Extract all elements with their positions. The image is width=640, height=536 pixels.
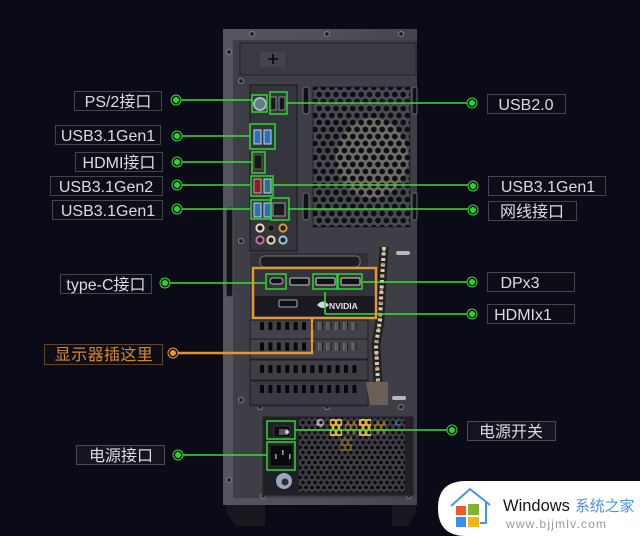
label: display: 显示器插这里: [55, 346, 153, 364]
label: HDMIx1: [488, 304, 574, 324]
case body: [223, 29, 417, 505]
label: DPx3: [488, 272, 574, 292]
label: USB2.0: USB2.0: [498, 97, 554, 114]
PSU mesh: [299, 418, 405, 492]
label: power switch: 电源开关: [479, 423, 543, 441]
label: USB2.0: [488, 94, 566, 114]
USB 2.0 ports: [270, 97, 285, 110]
USB 3.1 Gen2 port: [254, 179, 261, 193]
label: USB3.1Gen2: USB3.1Gen2: [59, 179, 153, 196]
watermark: 系统之家: [575, 498, 634, 515]
top panel with plus screw: [240, 43, 416, 75]
orange highlight: [173, 268, 376, 353]
DP port: [316, 278, 335, 285]
computer case rear: [223, 29, 417, 526]
vent slots: [303, 87, 417, 220]
windows house logo: [451, 489, 490, 527]
watermark: Windows: [503, 497, 570, 515]
DP port: [341, 278, 360, 285]
NVIDIA logo: NVIDIA: [329, 301, 358, 311]
case feet: [226, 500, 416, 526]
label: DPx3: DPx3: [500, 275, 540, 292]
label: type-C: type-C接口: [66, 276, 146, 294]
label dots: [160, 95, 478, 460]
PS/2 port: [253, 97, 267, 111]
label: power socket: 电源接口: [89, 447, 153, 465]
I/O shield: [250, 85, 297, 251]
LED cable: [366, 247, 388, 405]
label: USB3.1Gen1: USB3.1Gen1: [501, 179, 595, 196]
right labels: [468, 94, 606, 441]
label: ethernet: [488, 202, 576, 221]
graphics card bracket: [253, 268, 376, 318]
label: PS/2: [74, 92, 162, 111]
side slots: [392, 251, 410, 400]
label: HDMIx1: HDMIx1: [494, 307, 552, 324]
fan grille: [313, 87, 410, 227]
label: USB3.1Gen1: USB3.1Gen1: [61, 128, 155, 145]
USB 3.1 Gen1 pair: [254, 203, 271, 217]
USB 3.1 Gen1 ports: [254, 130, 271, 144]
label: HDMI: HDMI接口: [83, 154, 155, 172]
top bracket: [260, 256, 360, 267]
label: PS/2: PS/2接口: [85, 93, 151, 111]
power supply: [262, 416, 414, 496]
label: power socket: [76, 446, 164, 465]
expansion area: [250, 253, 376, 407]
label: power switch: [468, 422, 556, 441]
label: ethernet: 网线接口: [500, 203, 564, 221]
HDMI port: [254, 155, 262, 169]
label: USB3.1Gen1 lower: USB3.1Gen1: [61, 203, 155, 220]
power socket: [270, 445, 293, 466]
DP port: [290, 278, 309, 285]
brand logo: [276, 473, 292, 489]
connector lines: [165, 92, 473, 470]
ethernet port: [273, 203, 285, 216]
type-C port: [270, 278, 283, 284]
screws: [226, 32, 412, 498]
left labels: [44, 92, 164, 465]
left side rail: [226, 207, 233, 297]
watermark: www.bjjmlv.com: [505, 517, 607, 531]
slot covers: [250, 320, 368, 405]
port highlight boxes: [250, 92, 362, 470]
USB 3.1 Gen1 port: [264, 179, 271, 193]
power switch: [274, 426, 290, 437]
audio jacks: [256, 224, 287, 244]
HDMI port: [279, 300, 297, 307]
watermark: [438, 481, 640, 536]
